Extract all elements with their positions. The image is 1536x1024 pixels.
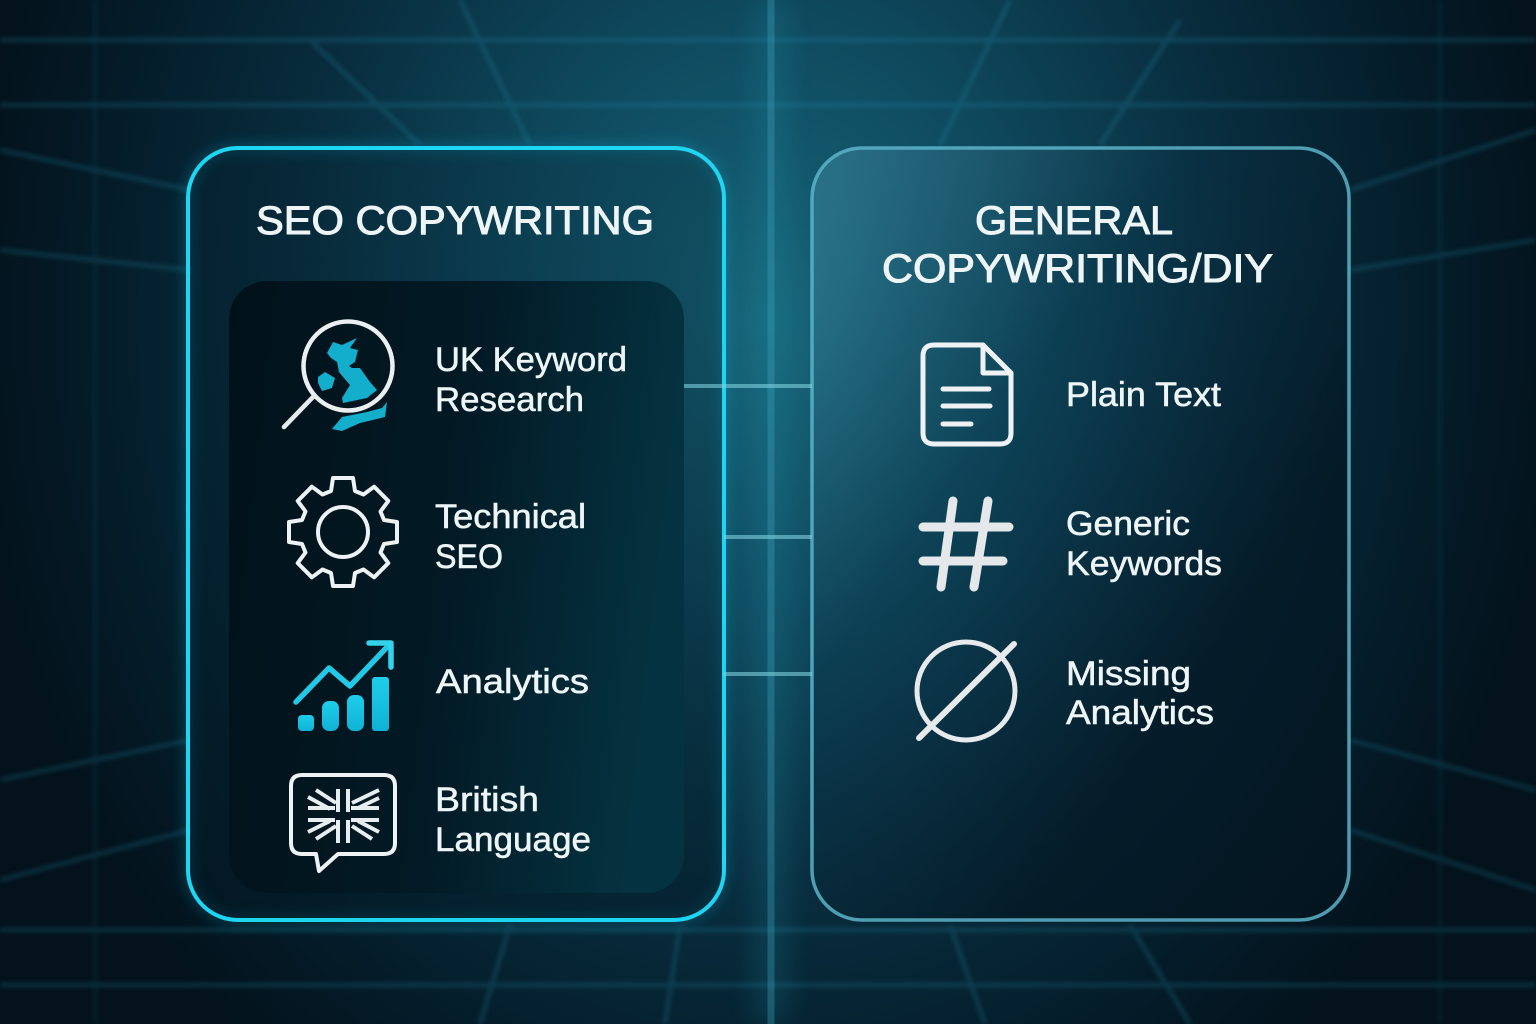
label: Technical SEO: Technical [435, 498, 586, 536]
heading: general copywriting/DIY [882, 199, 1273, 291]
label: Missing Analytics [1066, 655, 1214, 732]
label: Technical SEO: SEO [435, 538, 503, 576]
panel: general copywriting / DIY [812, 148, 1349, 920]
label: Generic Keywords: Keywords [1066, 545, 1222, 583]
label: Generic Keywords: Generic [1066, 505, 1190, 543]
label: British Language: Language [435, 821, 591, 859]
label: British Language: British [435, 781, 539, 819]
label: Plain Text: Plain Text [1066, 376, 1222, 414]
icon: British flag speech bubble [291, 775, 395, 871]
label: Missing Analytics: Analytics [1066, 694, 1214, 732]
heading: SEO copywriting: SEO COPYWRITING [256, 199, 654, 243]
heading: general copywriting/DIY: COPYWRITING/DIY [882, 247, 1273, 291]
label: UK Keyword Research [435, 341, 627, 419]
icon: analytics chart [296, 643, 391, 731]
label: Missing Analytics: Missing [1066, 655, 1191, 693]
label: UK Keyword Research: Research [435, 381, 584, 419]
label: UK Keyword Research: UK Keyword [435, 341, 627, 379]
label: Generic Keywords [1066, 505, 1222, 583]
panel: inner feature list [229, 281, 684, 893]
label: Technical SEO [435, 498, 586, 576]
label: British Language [435, 781, 591, 859]
label: Analytics: Analytics [436, 663, 589, 701]
heading: general copywriting/DIY: GENERAL [975, 199, 1173, 243]
icon: missing / prohibited [917, 642, 1015, 740]
icon: hash [923, 501, 1009, 587]
connector lines [684, 386, 812, 674]
icon: document [923, 345, 1011, 444]
panel: SEO copywriting [188, 148, 724, 920]
icon: magnifier over UK map [284, 322, 392, 431]
icon: gear [289, 478, 397, 586]
